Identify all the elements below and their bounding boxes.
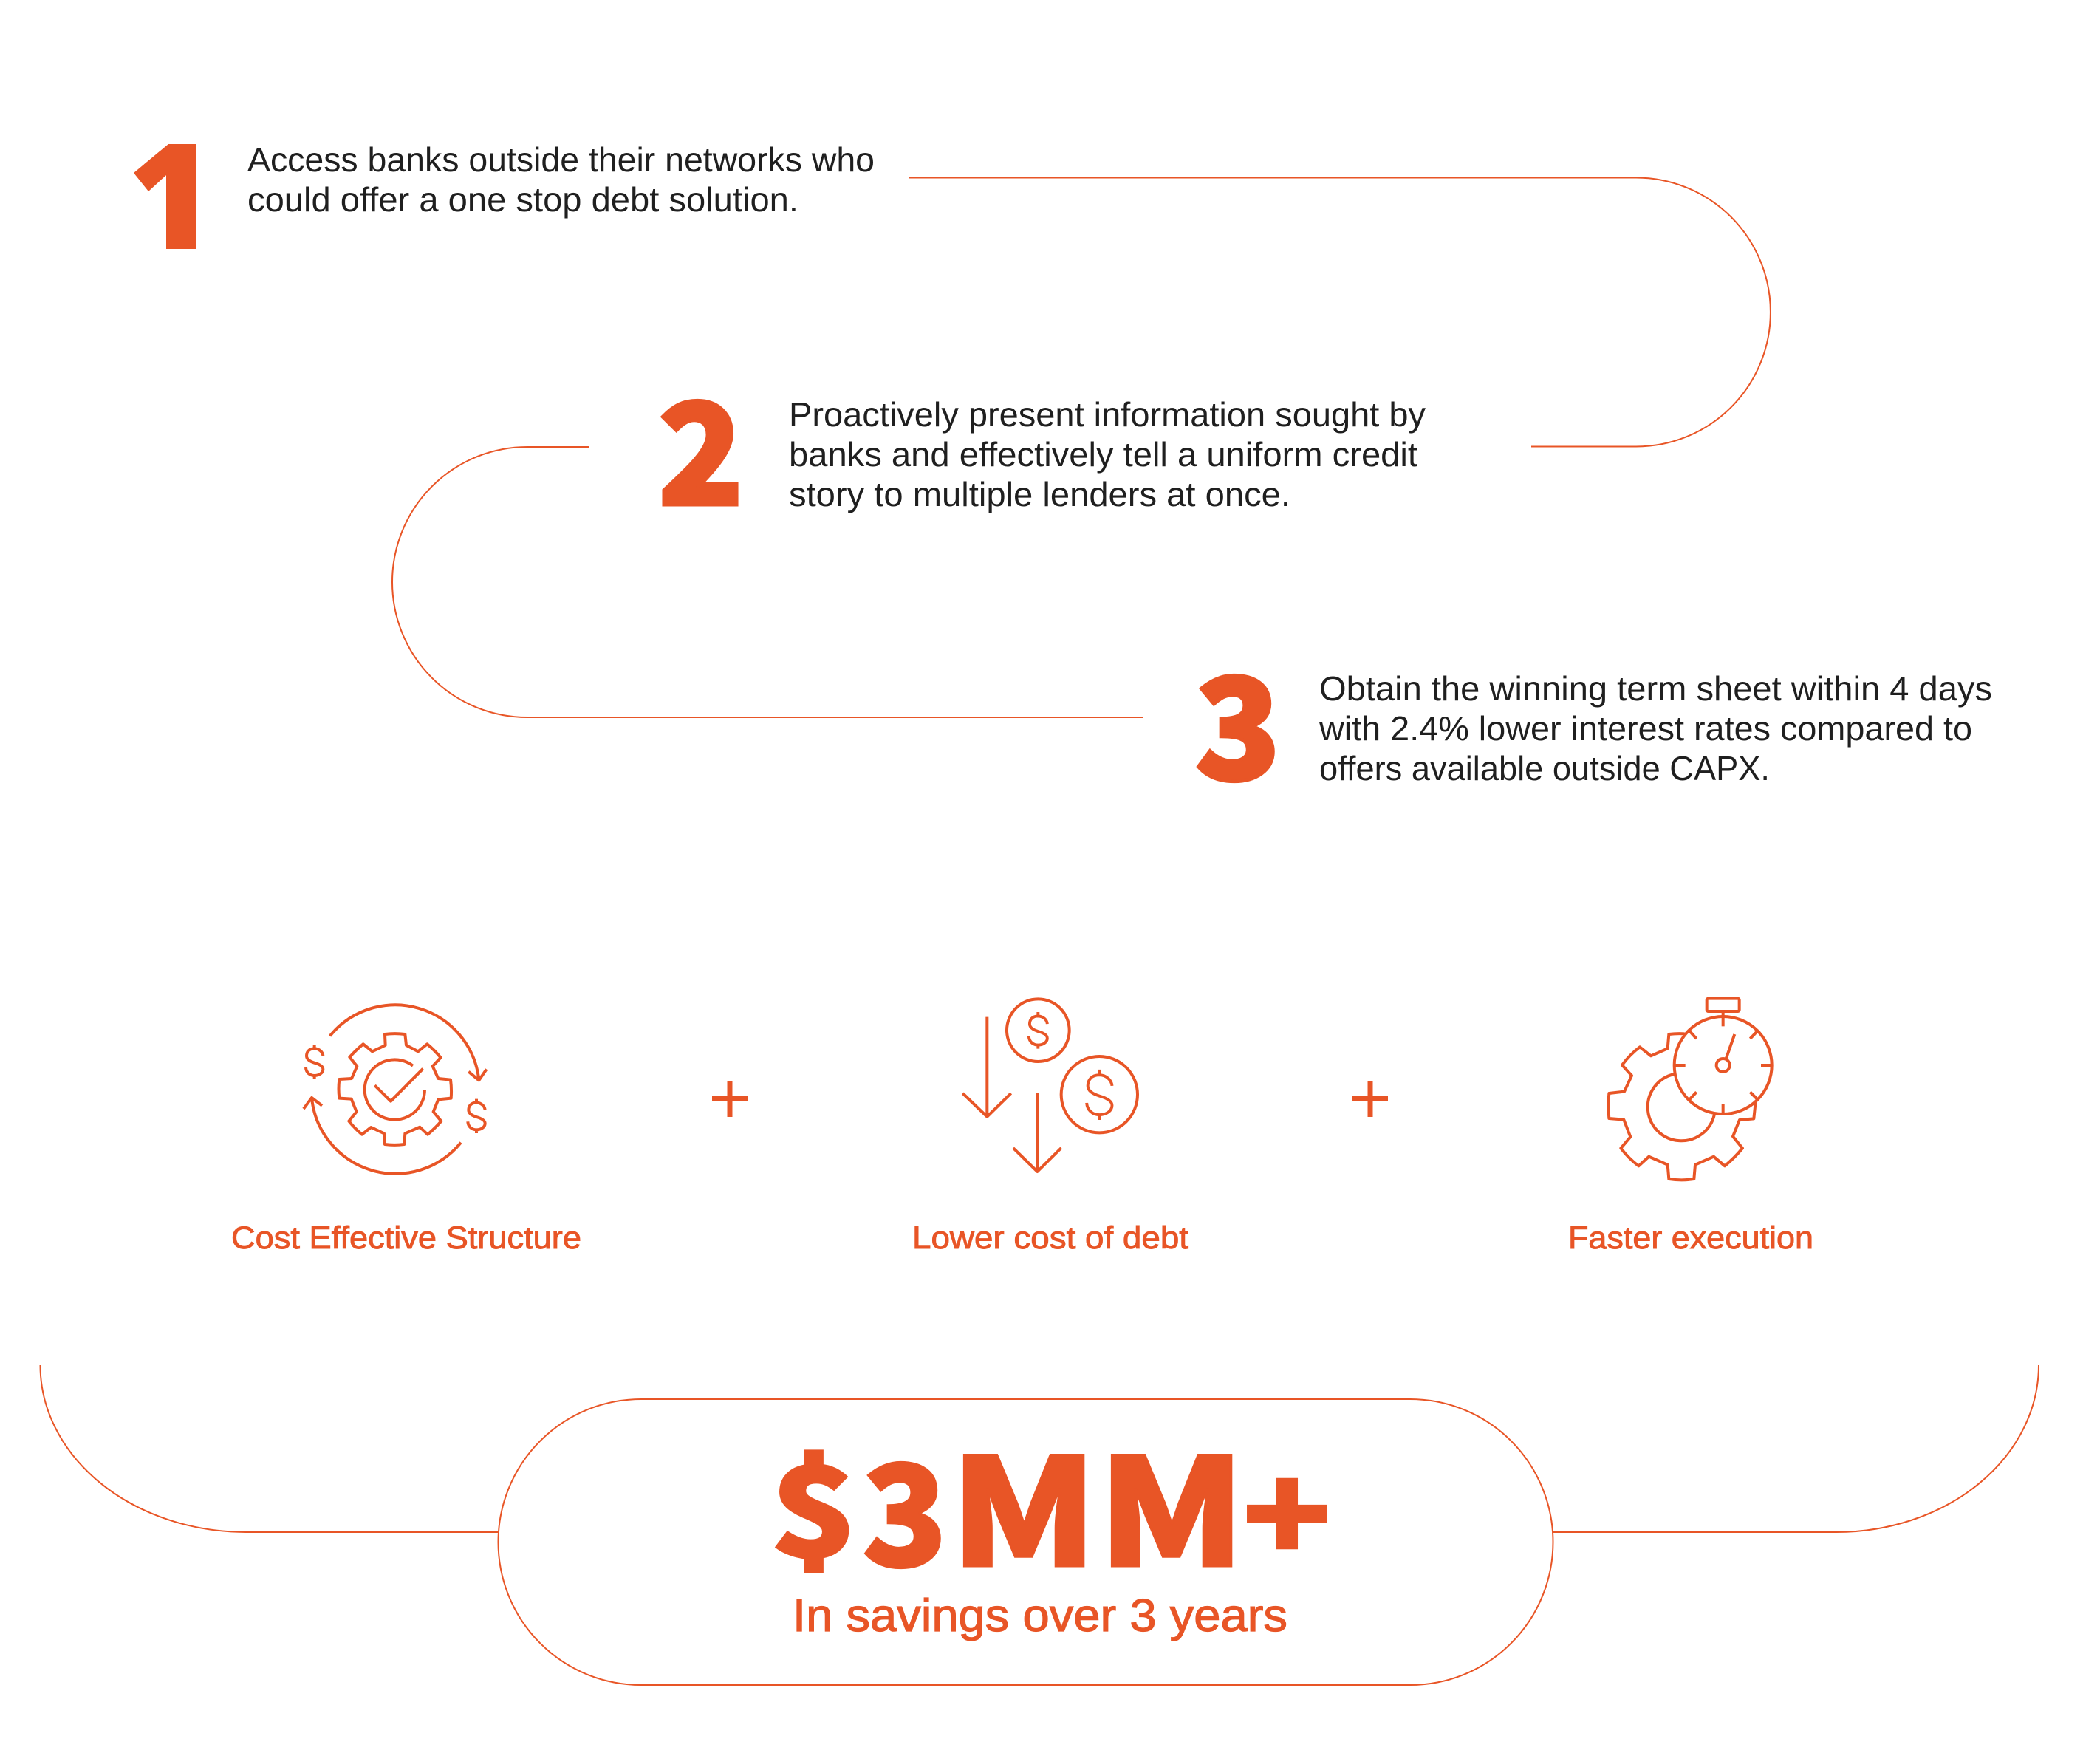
step 3 text bbox=[1319, 669, 1992, 787]
step 1 bbox=[134, 144, 873, 249]
connector: right bracket into savings pill bbox=[1553, 1365, 2039, 1532]
step 3 text: Obtain the winning term sheet within 4 days bbox=[1319, 669, 1992, 708]
plus sign 1 bbox=[712, 1081, 748, 1117]
plus sign 2 bbox=[1352, 1081, 1388, 1117]
number 1: 1 bbox=[130, 85, 216, 290]
pill outline bbox=[498, 1399, 1553, 1685]
number 2: 2 bbox=[658, 342, 744, 545]
savings pill bbox=[498, 1394, 1553, 1685]
label: Lower cost of debt bbox=[912, 1220, 1188, 1256]
step 3 text: offers available outside CAPX. bbox=[1319, 749, 1770, 787]
step 2 text: Proactively present information sought by bbox=[789, 395, 1426, 434]
benefit: faster execution bbox=[1568, 999, 1813, 1256]
icon: gear with circular arrows and dollars bbox=[304, 1005, 487, 1174]
benefit: lower cost of debt bbox=[912, 999, 1188, 1256]
savings figure: + bbox=[1242, 1414, 1332, 1599]
connector: step 2 to step 3 bbox=[392, 447, 1143, 717]
step 2 text: banks and effectively tell a uniform credit bbox=[789, 435, 1417, 474]
savings figure: MM bbox=[950, 1394, 1245, 1610]
step 1 text bbox=[247, 140, 875, 219]
step 3 bbox=[1195, 617, 1992, 820]
connector: step 1 to step 2 bbox=[909, 177, 1771, 446]
savings caption: In savings over 3 years bbox=[793, 1590, 1287, 1641]
savings figure: $ bbox=[770, 1413, 858, 1593]
step 2 bbox=[658, 342, 1426, 545]
step 1 text: could offer a one stop debt solution. bbox=[247, 180, 798, 219]
icon: dollar coins with down arrows bbox=[962, 999, 1138, 1172]
savings figure bbox=[770, 1394, 1332, 1610]
step 2 text bbox=[789, 395, 1426, 513]
savings figure: 3 bbox=[862, 1404, 948, 1607]
number 3: 3 bbox=[1195, 617, 1281, 820]
step 1 text: Access banks outside their networks who bbox=[247, 140, 875, 179]
benefit: cost effective structure bbox=[231, 1005, 581, 1256]
label: Faster execution bbox=[1568, 1220, 1813, 1256]
icon: gear with stopwatch bbox=[1608, 999, 1772, 1180]
step 2 text: story to multiple lenders at once. bbox=[789, 475, 1290, 513]
step 3 text: with 2.4% lower interest rates compared to bbox=[1319, 709, 1972, 748]
connector: left bracket into savings pill bbox=[40, 1365, 498, 1532]
label: Cost Effective Structure bbox=[231, 1220, 581, 1256]
